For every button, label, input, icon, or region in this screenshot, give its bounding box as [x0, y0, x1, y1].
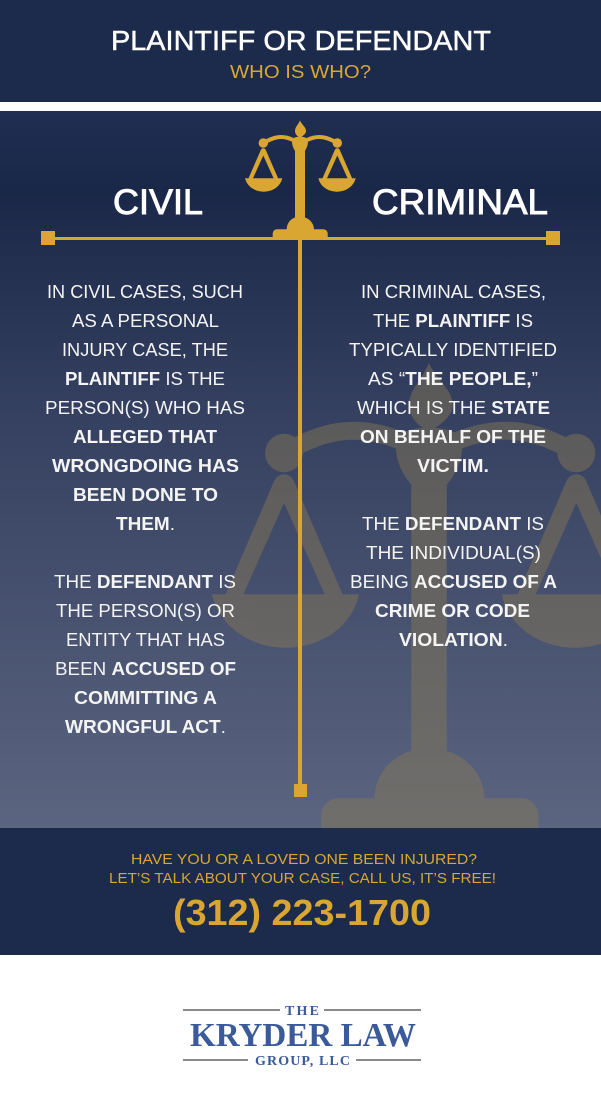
text block: civil plaintiff: INJURY CASE, THE [62, 339, 228, 360]
text block: criminal defendant [350, 513, 557, 650]
text block: criminal plaintiff: THE PLAINTIFF IS [373, 310, 533, 331]
text block: criminal plaintiff: VICTIM. [417, 455, 489, 476]
title: PLAINTIFF OR DEFENDANT [111, 25, 491, 56]
text block: civil plaintiff: PLAINTIFF IS THE [65, 368, 225, 389]
text block: criminal defendant: CRIME OR CODE [375, 600, 530, 621]
heading: criminal: CRIMINAL [372, 183, 548, 222]
text block: civil plaintiff: AS A PERSONAL [72, 310, 219, 331]
logo: The Kryder Law Group: THE [285, 1004, 319, 1019]
text block: criminal plaintiff [349, 281, 557, 476]
logo: The Kryder Law Group: GROUP, LLC [255, 1054, 350, 1069]
text block: criminal plaintiff: TYPICALLY IDENTIFIED [349, 339, 557, 360]
text block: civil defendant: ENTITY THAT HAS [66, 629, 225, 650]
text block: civil defendant: THE DEFENDANT IS [54, 571, 236, 592]
icon: large watermark scales [212, 363, 601, 833]
text block: civil defendant: BEEN ACCUSED OF [55, 658, 236, 679]
axis: horizontal and vertical gold lines [41, 231, 560, 797]
text block: civil plaintiff: BEEN DONE TO [73, 484, 218, 505]
text block: criminal defendant: THE INDIVIDUAL(S) [366, 542, 541, 563]
text block: civil defendant: COMMITTING A [74, 687, 217, 708]
text block: criminal plaintiff: AS “THE PEOPLE,” [368, 368, 538, 389]
text block: civil defendant: WRONGFUL ACT . [65, 716, 226, 737]
callout text [109, 852, 496, 887]
heading: civil: CIVIL [113, 183, 203, 222]
text block: civil defendant [54, 571, 236, 737]
text block: criminal plaintiff: ON BEHALF OF THE [360, 426, 546, 447]
text block: criminal plaintiff: IN CRIMINAL CASES, [361, 281, 546, 302]
text block: civil plaintiff: PERSON(S) WHO HAS [45, 397, 245, 418]
logo: The Kryder Law Group: KRYDER LAW [190, 1017, 416, 1054]
header band [0, 0, 601, 102]
text block: civil defendant: THE PERSON(S) OR [56, 600, 235, 621]
text block: criminal plaintiff: WHICH IS THE STATE [357, 397, 550, 418]
callout text: LET’S TALK ABOUT YOUR CASE, CALL US, IT’S FREE! [109, 871, 496, 887]
text block: criminal defendant: VIOLATION. [399, 629, 508, 650]
icon: gold scales [245, 120, 356, 238]
subtitle: WHO IS WHO? [230, 62, 371, 82]
text block: civil plaintiff: ALLEGED THAT [73, 426, 218, 447]
phone number: (312) 223-1700 [173, 892, 431, 933]
text block: civil plaintiff: IN CIVIL CASES, SUCH [47, 281, 243, 302]
text block: criminal defendant: THE DEFENDANT IS [362, 513, 544, 534]
panel: civil vs criminal comparison [0, 111, 601, 833]
text block: civil plaintiff [45, 281, 245, 534]
text block: civil plaintiff: WRONGDOING HAS [52, 455, 239, 476]
callout text: HAVE YOU OR A LOVED ONE BEEN INJURED? [131, 852, 477, 868]
logo: The Kryder Law Group [183, 1004, 421, 1069]
text block: civil plaintiff: THEM. [116, 513, 175, 534]
text block: criminal defendant: BEING ACCUSED OF A [350, 571, 557, 592]
footer band: call to action [0, 828, 601, 955]
